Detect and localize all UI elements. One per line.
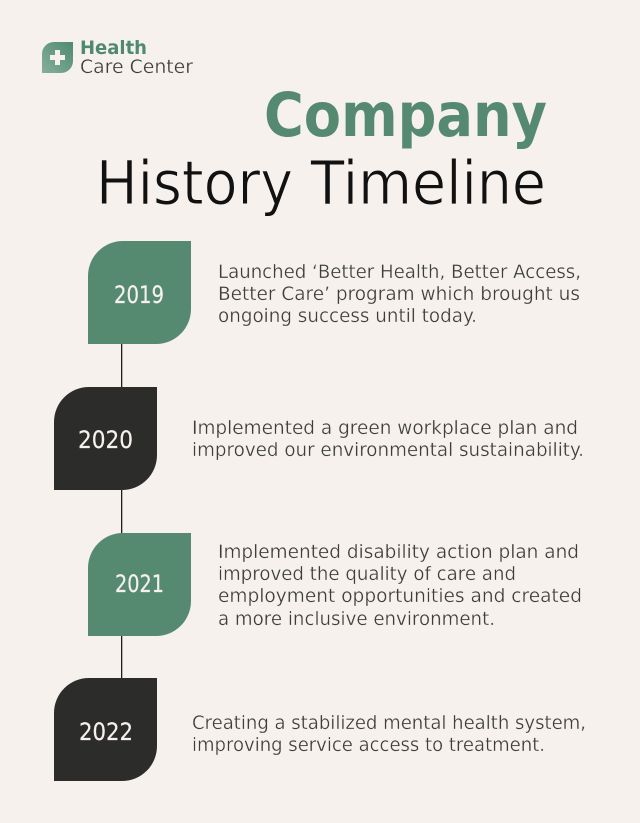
- year badge: 2019: 2019: [114, 281, 164, 309]
- description: 2022: [192, 712, 586, 756]
- description: 2021: employment opportunities and created: [218, 585, 582, 607]
- description: 2020: improved our environmental sustainability.: [192, 439, 584, 461]
- timeline entry: 2020: [54, 387, 584, 490]
- description: 2020: [192, 417, 584, 461]
- logo text: Care Center: [80, 56, 193, 78]
- timeline entry: 2022: [54, 678, 586, 781]
- year badge: 2019: [88, 241, 191, 344]
- title: [96, 80, 547, 219]
- description: 2019: ongoing success until today.: [218, 305, 477, 327]
- year badge: 2021: [88, 533, 191, 636]
- year badge: 2020: [54, 387, 157, 490]
- logo: Health Care Center: [42, 37, 193, 78]
- description: 2022: Creating a stabilized mental health system,: [192, 712, 586, 734]
- description: 2019: Better Care’ program which brought us: [218, 283, 580, 305]
- timeline entry: 2021: [88, 533, 582, 636]
- description: 2019: Launched ‘Better Health, Better Access,: [218, 261, 581, 283]
- timeline entry: 2019: [88, 241, 581, 344]
- year badge: 2022: [54, 678, 157, 781]
- year badge: 2021: 2021: [115, 570, 164, 598]
- description: 2020: Implemented a green workplace plan and: [192, 417, 578, 439]
- description: 2019: [218, 261, 581, 327]
- year badge: 2020: 2020: [78, 426, 133, 454]
- year badge: 2022: 2022: [79, 718, 133, 746]
- description: 2022: improving service access to treatment.: [192, 734, 545, 756]
- title: Company: [264, 80, 547, 151]
- icon: leaf with medical cross: [42, 42, 73, 73]
- description: 2021: a more inclusive environment.: [218, 608, 495, 630]
- logo text: Health: [80, 37, 147, 59]
- timeline connector line: [121, 344, 122, 678]
- title: History Timeline: [96, 148, 546, 219]
- description: 2021: improved the quality of care and: [218, 563, 516, 585]
- logo text: [80, 37, 193, 78]
- description: 2021: [218, 541, 582, 630]
- description: 2021: Implemented disability action plan and: [218, 541, 579, 563]
